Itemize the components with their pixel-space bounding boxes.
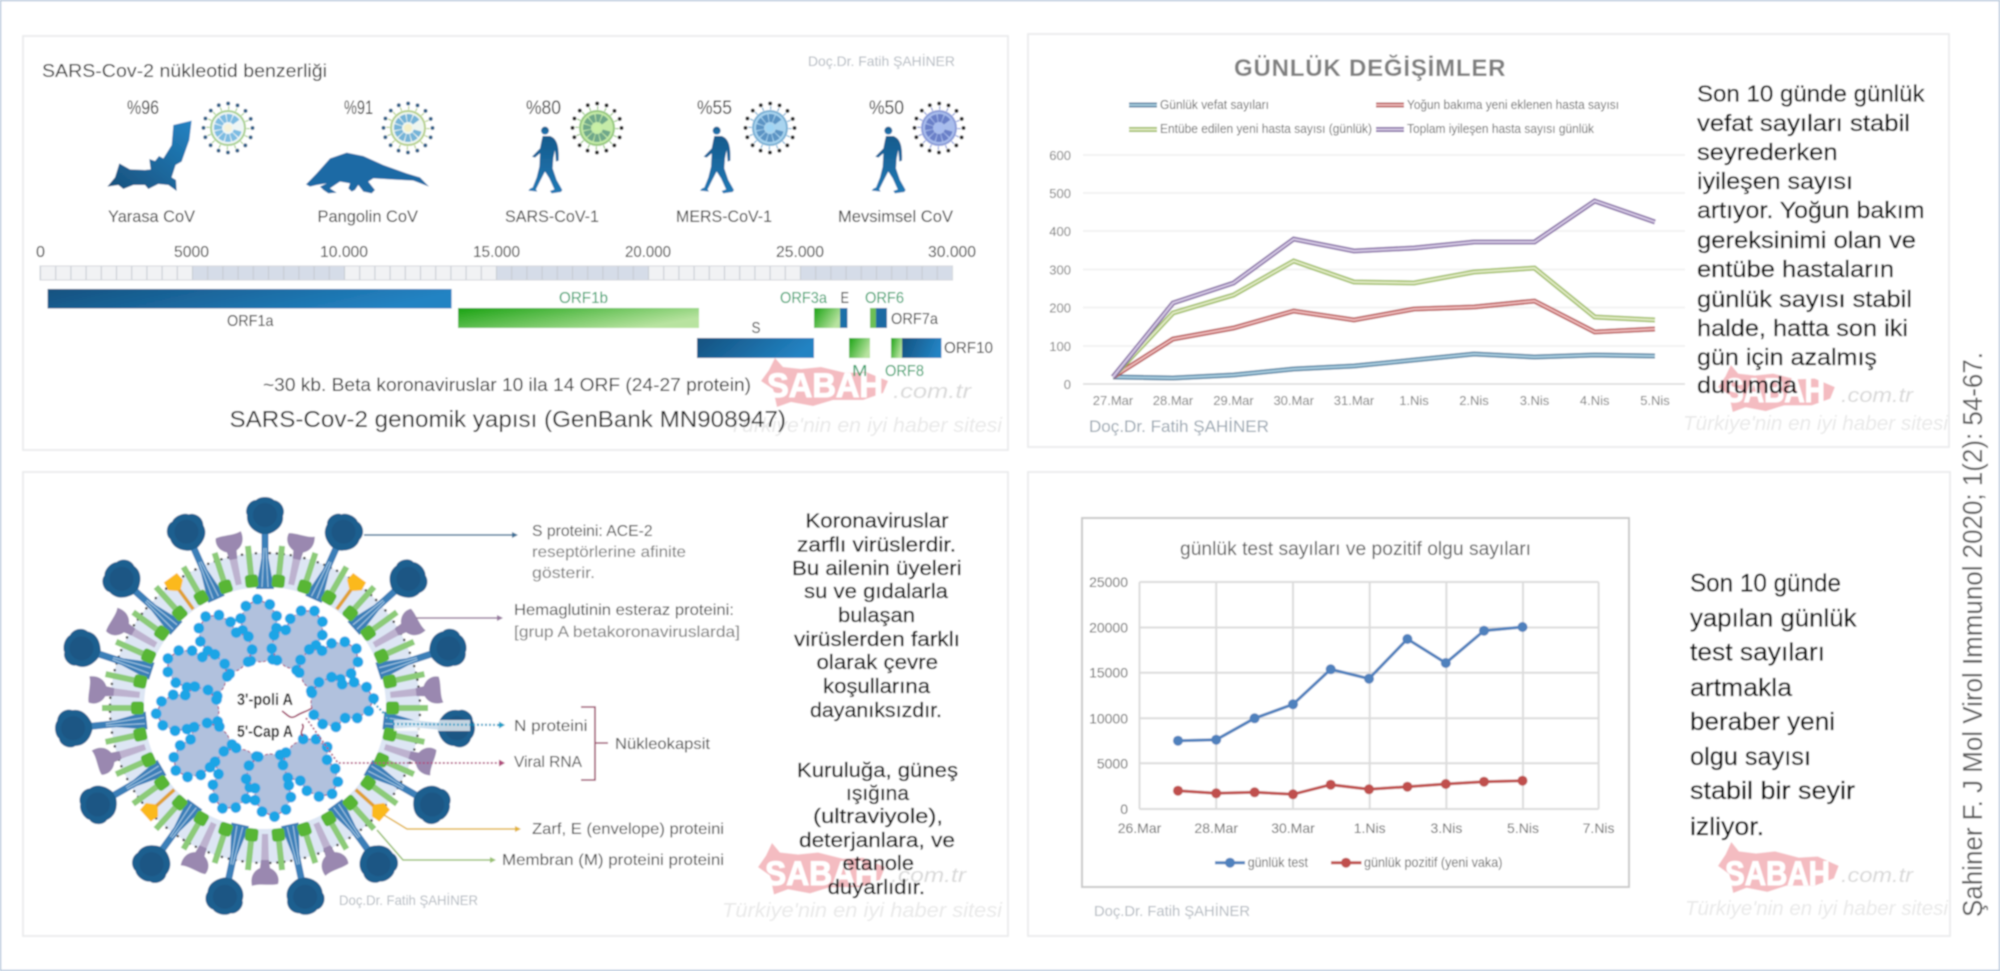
panel: genome structure (23, 36, 1008, 450)
line chart: daily changes: 31.Mar (1334, 393, 1375, 408)
x axis labels: 30.Mar (1271, 820, 1315, 836)
text: daily changes commentary: entübe hastaların (1697, 256, 1894, 282)
callout: S protein: S proteini: ACE-2 (532, 523, 653, 540)
watermark: Sabah: Türkiye'nin en iyi haber sitesi (729, 415, 1003, 437)
line chart legend: Toplam iyileşen hasta sayısı günlük (1407, 122, 1595, 136)
x axis labels: 28.Mar (1194, 820, 1238, 836)
line chart: daily changes: 100 (1049, 339, 1071, 354)
genome scale numbers: 20.000 (625, 244, 671, 261)
ORF labels: ORF6 (865, 290, 904, 307)
y axis labels: 15000 (1089, 665, 1128, 681)
x axis labels: 3.Nis (1430, 820, 1462, 836)
ORF labels: ORF3a (780, 290, 827, 307)
callout: S protein (364, 523, 686, 582)
ORF labels: ORF10 (944, 340, 993, 357)
ORF labels: M (852, 363, 868, 380)
species labels: Yarasa CoV (108, 207, 196, 226)
callout: N protein and viral RNA: Nükleokapsit (615, 736, 711, 753)
line chart legend: Yoğun bakıma yeni eklenen hasta sayısı (1407, 98, 1619, 112)
text: coronavirus description: etanole (842, 853, 914, 875)
text: daily changes commentary: Son 10 günde günlük (1697, 81, 1925, 107)
y axis labels (1089, 574, 1128, 817)
genome scale numbers: 0 (36, 244, 45, 261)
genome scale numbers: 10.000 (320, 244, 368, 261)
text: daily changes commentary: durumda (1697, 372, 1797, 398)
membrane, envelope and hemagglutinin proteins (86, 529, 444, 886)
text: coronavirus description: zarflı virüslerdir. (797, 535, 956, 557)
callout: hemagglutinin esterase: [grup A betakoronaviruslarda] (514, 624, 740, 641)
similarity percentages: %50 (869, 98, 904, 119)
text: tests commentary: olgu sayısı (1690, 743, 1811, 771)
callout: N protein and viral RNA: N proteini (514, 718, 588, 735)
line chart: daily changes: 400 (1049, 224, 1071, 239)
text: tests commentary: beraber yeni (1690, 708, 1835, 736)
y axis labels: 0 (1120, 801, 1128, 817)
text: coronavirus description: Koronaviruslar (806, 511, 949, 533)
text: tests commentary: stabil bir seyir (1690, 777, 1855, 805)
line chart: daily changes: 0 (1064, 377, 1071, 392)
watermark: Sabah: SABAH (1725, 372, 1825, 410)
text: coronavirus description: su ve gıdalarla (804, 581, 949, 603)
species labels (108, 207, 954, 226)
text: tests commentary: yapılan günlük (1690, 605, 1857, 633)
callout: hemagglutinin esterase (416, 602, 740, 641)
species labels: SARS-CoV-1 (505, 207, 599, 226)
x axis labels: 1.Nis (1354, 820, 1386, 836)
x axis labels (1118, 820, 1615, 836)
heading: nucleotide similarity: SARS-Cov-2 nükleotid benzerliği (42, 61, 327, 81)
line chart: daily changes: 600 (1049, 148, 1071, 163)
icons: virus particles (204, 104, 964, 152)
chart legend: günlük test (1248, 854, 1308, 870)
line chart: daily changes: 2.Nis (1459, 393, 1489, 408)
species labels: Pangolin CoV (318, 207, 419, 226)
text: coronavirus description (792, 511, 962, 899)
line chart: daily changes: 500 (1049, 186, 1071, 201)
watermark: Sabah: Türkiye'nin en iyi haber sitesi (1685, 898, 1949, 920)
text: coronavirus description: bulaşan (838, 605, 915, 627)
text: daily changes commentary: seyrederken (1697, 139, 1838, 165)
text: daily changes commentary: iyileşen sayısı (1697, 168, 1853, 194)
watermark: Sabah: .com.tr (1841, 865, 1915, 887)
citation: Şahiner F. J Mol Virol Immunol 2020; 1(2): 54-67. (1957, 352, 1988, 917)
text: coronavirus description: deterjanlara, ve (799, 830, 955, 852)
genome scale numbers: 5000 (174, 244, 209, 261)
text: daily changes commentary: gereksinimi olan ve (1697, 227, 1916, 253)
spike proteins (53, 497, 477, 918)
watermark: Sabah (722, 843, 1003, 922)
y axis labels: 5000 (1097, 755, 1128, 771)
callout: N protein and viral RNA (306, 703, 711, 780)
watermark: Sabah: Türkiye'nin en iyi haber sitesi (1683, 413, 1949, 435)
similarity percentages: %55 (697, 98, 732, 119)
watermark: Sabah: SABAH (765, 855, 878, 893)
species labels: MERS-CoV-1 (676, 207, 772, 226)
callout: N protein and viral RNA: Viral RNA (514, 754, 582, 771)
chart legend: günlük pozitif (yeni vaka) (1364, 854, 1502, 870)
line chart: daily changes: 28.Mar (1153, 393, 1194, 408)
author credit: Doç.Dr. Fatih ŞAHİNER (808, 52, 955, 69)
chart box: tests and positive cases (1082, 518, 1629, 887)
ORF labels: ORF1b (559, 290, 608, 307)
line chart: daily changes: 5.Nis (1640, 393, 1670, 408)
chart title: günlük test sayıları ve pozitif olgu sayıları (1180, 539, 1531, 560)
nucleocapsid lobes (149, 592, 382, 825)
caption: ORF count: ~30 kb. Beta koronaviruslar 10 ila 14 ORF (24-27 protein) (263, 375, 751, 395)
callout: hemagglutinin esterase: Hemaglutinin esteraz proteini: (514, 602, 734, 619)
x axis labels: 5.Nis (1507, 820, 1539, 836)
text: tests commentary: izliyor. (1690, 813, 1764, 841)
ORF bars (48, 289, 942, 358)
watermark: Sabah: SABAH (767, 367, 883, 405)
text: coronavirus description: olarak çevre (816, 652, 938, 674)
viral RNA strand (282, 708, 312, 736)
heading: genome structure: SARS-Cov-2 genomik yapısı (GenBank MN908947) (230, 406, 786, 432)
callout: S protein: gösterir. (532, 565, 595, 582)
similarity percentages: %80 (526, 98, 561, 119)
text: tests commentary: artmakla (1690, 674, 1792, 702)
ORF labels: S (752, 320, 760, 337)
line chart legend: Entübe edilen yeni hasta sayısı (günlük) (1160, 122, 1372, 136)
text: tests commentary: test sayıları (1690, 639, 1825, 667)
text: tests commentary: Son 10 günde (1690, 570, 1841, 598)
panel: virus structure (23, 472, 1008, 936)
line chart: daily changes: 27.Mar (1093, 393, 1134, 408)
callout: S protein: reseptörlerine afinite (532, 544, 686, 561)
callout: envelope protein (384, 815, 724, 838)
watermark: Sabah: .com.tr (1841, 385, 1915, 407)
icons: humans (528, 127, 906, 193)
x axis labels: 26.Mar (1118, 820, 1162, 836)
callout: envelope protein: Zarf, E (envelope) proteini (532, 821, 724, 838)
line chart legend (1129, 98, 1619, 136)
text: daily changes commentary: halde, hatta son iki (1697, 315, 1908, 341)
text: coronavirus description: duyarlıdır. (828, 877, 925, 899)
series: daily tests (1173, 622, 1528, 746)
icon: bat (107, 121, 192, 191)
y axis labels: 25000 (1089, 574, 1128, 590)
line chart: daily changes: 30.Mar (1273, 393, 1315, 408)
author credit: Doç.Dr. Fatih ŞAHİNER (339, 891, 478, 908)
genome scale numbers: 15.000 (473, 244, 520, 261)
icon: pangolin (306, 153, 429, 193)
ORF labels: E (840, 290, 849, 307)
series: daily positives (1173, 776, 1528, 799)
watermark: Sabah (729, 358, 1003, 437)
text: daily changes commentary: artıyor. Yoğun bakım (1697, 197, 1924, 223)
watermark: Sabah (1683, 365, 1949, 435)
similarity percentages: %91 (344, 98, 373, 119)
watermark: Sabah: .com.tr (893, 381, 973, 403)
species labels: Mevsimsel CoV (838, 207, 954, 226)
callout: membrane protein (377, 830, 724, 869)
label: 5' cap A: 5'-Cap A (237, 722, 293, 741)
author credit: Doç.Dr. Fatih ŞAHİNER (1089, 417, 1269, 436)
x axis labels: 7.Nis (1583, 820, 1615, 836)
genome scale numbers: 30.000 (928, 244, 976, 261)
text: coronavirus description: Kuruluğa, güneş (797, 760, 958, 782)
ORF labels: ORF1a (227, 313, 274, 330)
similarity percentages (127, 98, 904, 119)
callout: membrane protein: Membran (M) proteini proteini (502, 852, 724, 869)
similarity percentages: %96 (127, 98, 159, 119)
genome scale numbers: 25.000 (776, 244, 824, 261)
line chart: daily changes: 3.Nis (1520, 393, 1550, 408)
text: daily changes commentary: gün için azalmış (1697, 344, 1877, 370)
line chart: daily changes: 29.Mar (1213, 393, 1254, 408)
text: coronavirus description: dayanıksızdır. (810, 700, 942, 722)
ORF labels: ORF7a (891, 311, 938, 328)
panel: daily tests (1028, 472, 1950, 936)
y axis labels: 20000 (1089, 620, 1128, 636)
line chart: daily changes: 300 (1049, 262, 1071, 278)
text: coronavirus description: (ultraviyole), (813, 806, 943, 828)
watermark: Sabah: Türkiye'nin en iyi haber sitesi (722, 900, 1003, 922)
text: daily changes commentary: günlük sayısı stabil (1697, 286, 1912, 312)
panel: daily changes (1028, 34, 1949, 447)
ORF labels (227, 290, 993, 380)
genome scale numbers (36, 244, 976, 261)
diagram: coronavirus particle (53, 497, 477, 918)
line chart legend: Günlük vefat sayıları (1160, 98, 1269, 112)
line chart: daily changes: 1.Nis (1399, 393, 1429, 408)
line chart: daily changes: 4.Nis (1580, 393, 1610, 408)
line chart: daily changes (1049, 148, 1685, 408)
text: coronavirus description: ışığına (846, 783, 910, 805)
text: tests commentary (1690, 570, 1857, 841)
author credit: Doç.Dr. Fatih ŞAHİNER (1094, 902, 1250, 920)
chart legend (1215, 854, 1502, 870)
text: daily changes commentary: vefat sayıları stabil (1697, 110, 1910, 136)
text: coronavirus description: Bu ailenin üyeleri (792, 558, 962, 580)
text: coronavirus description: koşullarına (823, 676, 931, 698)
watermark: Sabah: SABAH (1725, 855, 1830, 893)
text: coronavirus description: virüslerden farklı (794, 629, 960, 651)
text: daily changes commentary (1697, 81, 1925, 398)
genome ruler (40, 266, 952, 280)
watermark: Sabah (1685, 842, 1949, 920)
line chart: daily changes: 200 (1049, 300, 1071, 316)
watermark: Sabah: .com.tr (891, 865, 968, 887)
ORF labels: ORF8 (885, 363, 924, 380)
y axis labels: 10000 (1089, 710, 1128, 726)
label: 3' poly A: 3'-poli A (237, 690, 293, 709)
heading: daily changes: GÜNLÜK DEĞİŞİMLER (1234, 54, 1506, 82)
